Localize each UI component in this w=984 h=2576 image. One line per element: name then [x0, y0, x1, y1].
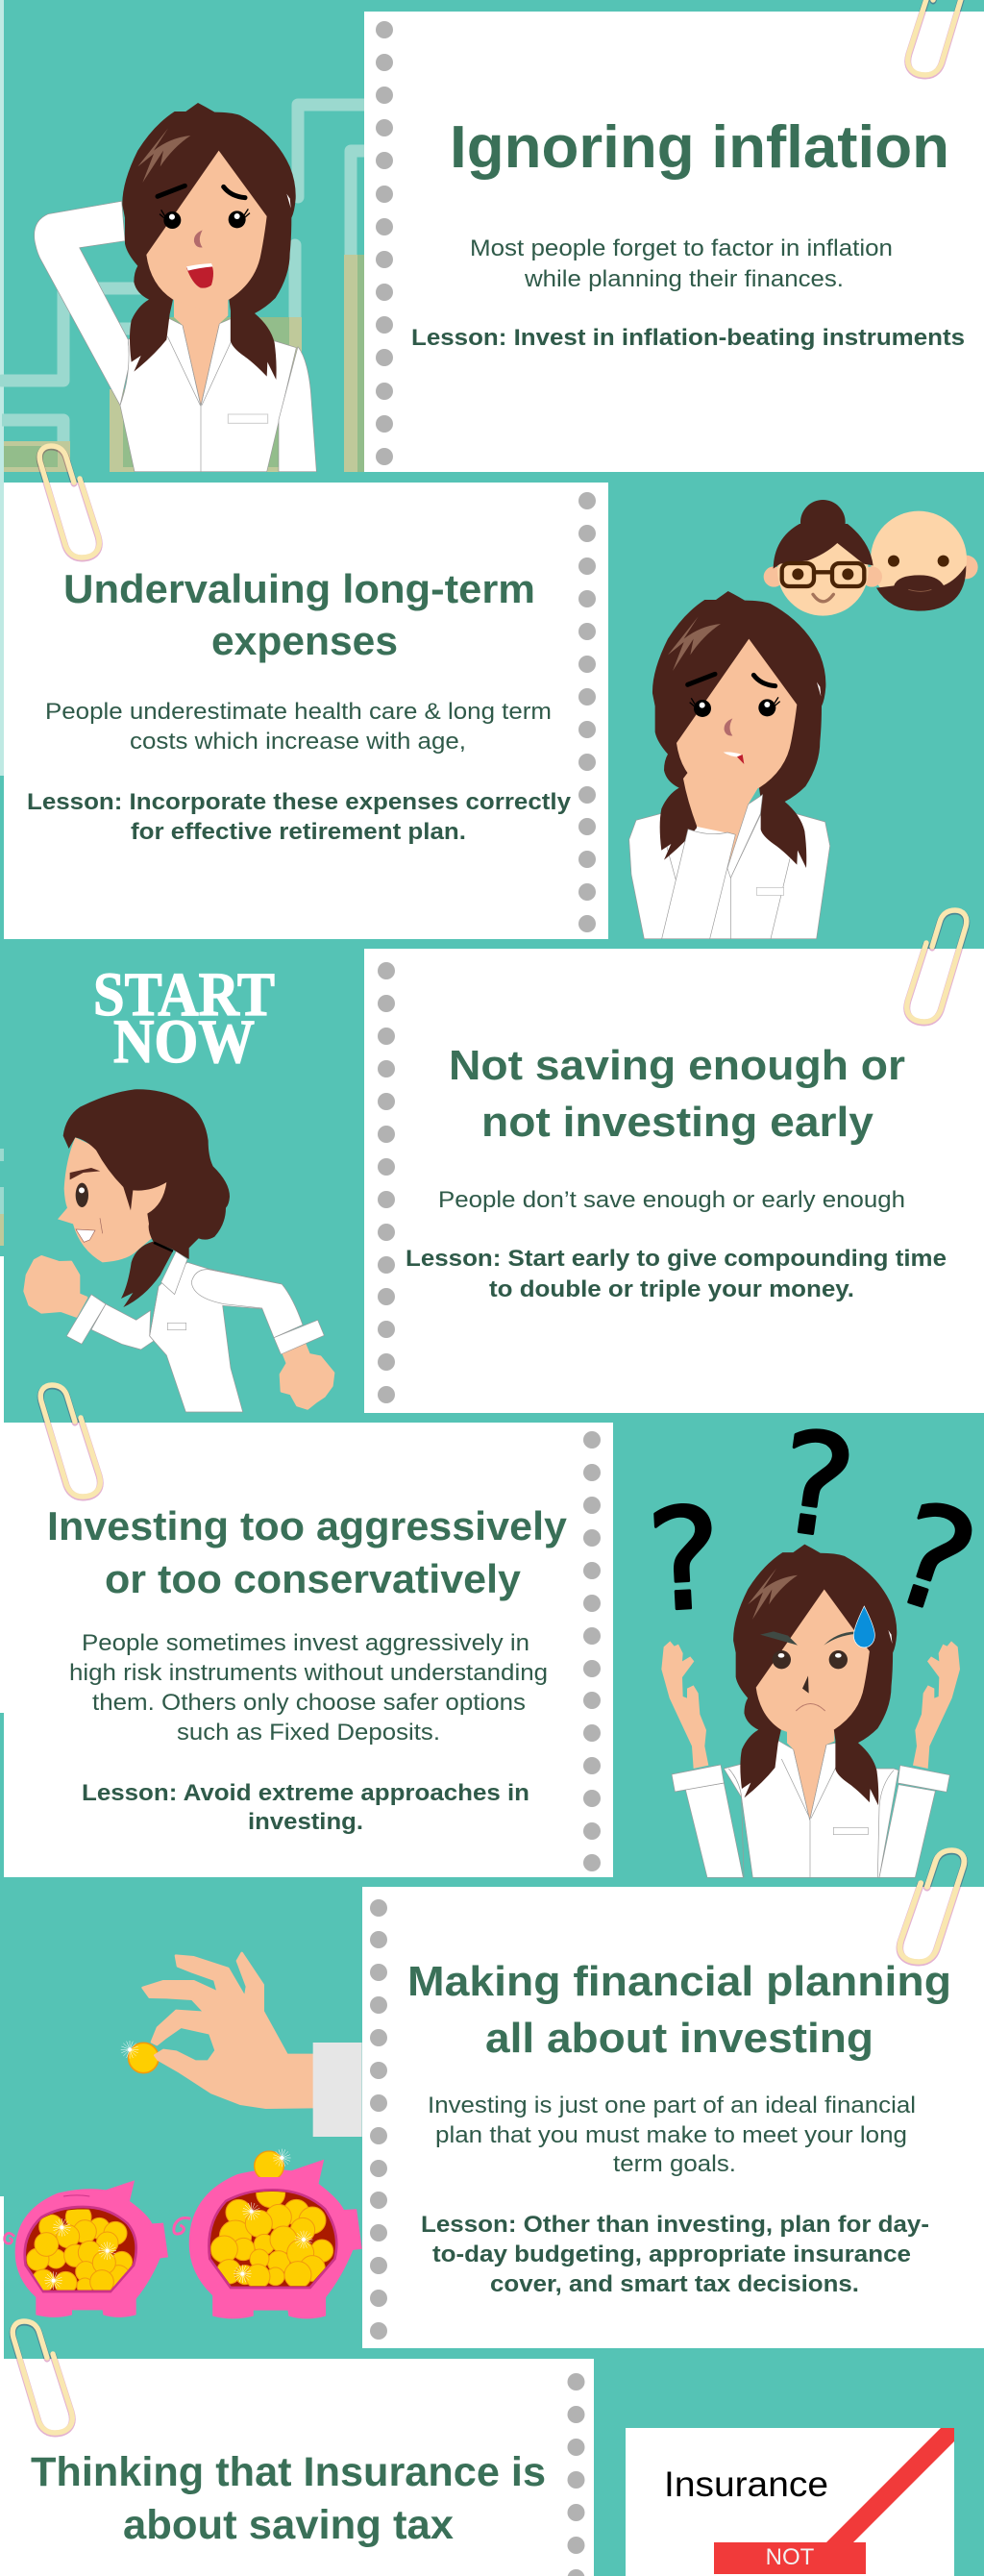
lesson: investing. [248, 1809, 363, 1835]
body text: Most people forget to factor in inflation [470, 235, 893, 261]
body text [470, 235, 893, 292]
heading: Investing too aggressively [47, 1503, 568, 1548]
paper [4, 1423, 613, 1877]
panel: thinking insurance is about saving tax [4, 2321, 954, 2576]
heading: Thinking that Insurance is [31, 2449, 546, 2495]
body text: such as Fixed Deposits. [177, 1720, 440, 1746]
heading: or too conservatively [105, 1556, 522, 1601]
lesson: for effective retirement plan. [131, 819, 466, 845]
heading: expenses [211, 618, 398, 663]
heading [31, 2449, 546, 2548]
body text: plan that you must make to meet your long [435, 2122, 907, 2148]
lesson: Lesson: Invest in inflation-beating instruments [411, 325, 965, 351]
heading [407, 1958, 951, 2062]
body text [69, 1630, 548, 1746]
paper [364, 12, 984, 472]
lesson [421, 2212, 929, 2297]
paper [362, 1887, 984, 2348]
start now sign: NOW [113, 1007, 255, 1077]
strike stripe [826, 2428, 954, 2542]
body text: Investing is just one part of an ideal financial [428, 2093, 916, 2118]
lesson: to-day budgeting, appropriate insurance [432, 2242, 911, 2267]
insurance label: Insurance [664, 2465, 828, 2504]
question marks [644, 1400, 984, 1648]
insurance card [626, 2428, 954, 2576]
figure: woman scratching head [35, 103, 316, 472]
body text: costs which increase with age, [130, 729, 466, 755]
paperclip [39, 446, 99, 558]
body text: People sometimes invest aggressively in [82, 1630, 529, 1656]
background chart lines [2, 105, 364, 472]
heading [47, 1503, 568, 1601]
lesson [27, 789, 572, 845]
panel: investing too aggressively [4, 1385, 984, 1877]
lesson: to double or triple your money. [489, 1276, 854, 1302]
heading: Making financial planning [407, 1958, 951, 2005]
lesson: Lesson: Incorporate these expenses correctly [27, 789, 572, 815]
not label [714, 2542, 866, 2574]
body text: People don’t save enough or early enough [438, 1187, 905, 1213]
heading: about saving tax [123, 2502, 454, 2548]
illustration: small piggy bank [5, 2180, 168, 2317]
body text: People underestimate health care & long term [45, 699, 552, 725]
paperclip [12, 2321, 72, 2434]
paper [4, 2359, 594, 2576]
lesson: Lesson: Avoid extreme approaches in [82, 1780, 529, 1806]
paperclip [908, 0, 968, 76]
paperclip [907, 910, 967, 1023]
icon: parents heads [764, 500, 978, 616]
lesson: cover, and smart tax decisions. [490, 2271, 859, 2297]
heading: Undervaluing long-term [63, 566, 535, 611]
lesson: Lesson: Other than investing, plan for day- [421, 2212, 929, 2238]
heading: Not saving enough or [449, 1042, 905, 1089]
paper [4, 483, 608, 939]
heading [63, 566, 535, 663]
lesson [406, 1246, 947, 1302]
body text: high risk instruments without understanding [69, 1660, 548, 1686]
figure: woman thinking [629, 591, 830, 939]
paperclip [40, 1385, 100, 1498]
lesson [82, 1780, 529, 1835]
left edge strip [0, 0, 4, 2576]
figure: confused woman [661, 1545, 960, 1877]
heading: not investing early [481, 1099, 874, 1146]
illustration: hand and coin [121, 1953, 362, 2137]
start now sign: START [93, 960, 275, 1029]
heading: all about investing [485, 2015, 873, 2062]
figure: woman running [25, 1089, 333, 1412]
start now sign [93, 960, 275, 1077]
not label: NOT [766, 2544, 815, 2570]
heading [449, 1042, 905, 1146]
paper [364, 949, 984, 1413]
panel: ignoring inflation [2, 0, 984, 472]
panel: making financial planning [5, 1850, 984, 2348]
heading: Ignoring inflation [450, 114, 949, 181]
body text [45, 699, 552, 755]
panel: undervaluing long-term expenses [4, 483, 978, 939]
paperclip [899, 1850, 964, 1963]
body text [428, 2093, 916, 2177]
panel: not saving enough [25, 446, 984, 1413]
question marks: ? [768, 1400, 864, 1572]
body text: them. Others only choose safer options [92, 1690, 526, 1716]
body text: term goals. [613, 2151, 736, 2177]
lesson: Lesson: Start early to give compounding time [406, 1246, 947, 1272]
question marks: ? [644, 1477, 726, 1644]
body text: while planning their finances. [524, 266, 844, 292]
illustration: large piggy bank [174, 2149, 362, 2318]
